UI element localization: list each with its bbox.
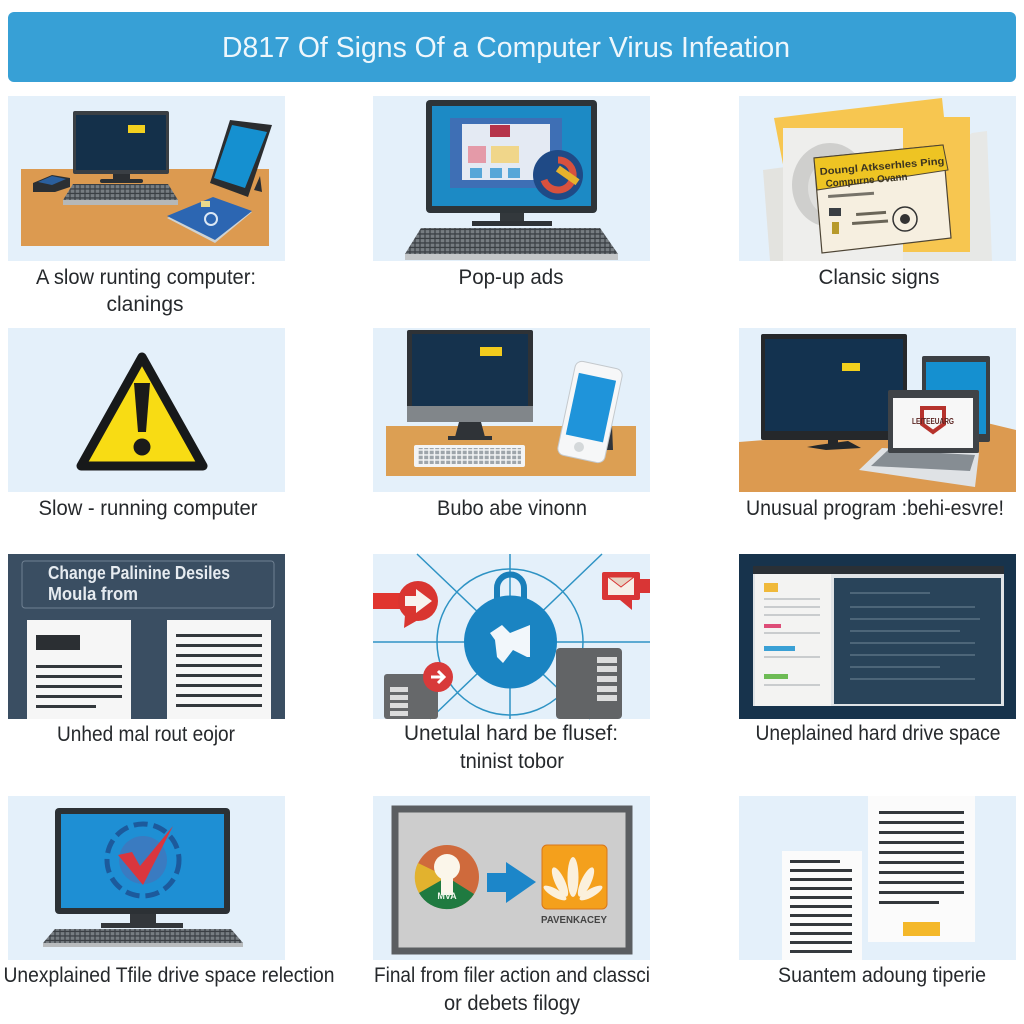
panel: monitor with check mark — [8, 796, 285, 960]
panel: change panel documents: Moula from — [48, 584, 138, 604]
caption 8: tninist tobor — [460, 750, 564, 773]
panel: classic signs documents: Compurne Ovann — [825, 172, 908, 190]
caption 12: Suantem adoung tiperie — [778, 964, 986, 987]
panel: file conversion screen: MVA — [437, 891, 457, 901]
caption 8: Unetulal hard be flusef: — [404, 722, 618, 745]
caption 8 — [404, 722, 618, 773]
caption 2: Pop-up ads — [458, 266, 564, 289]
panel: padlock network — [373, 554, 650, 719]
caption 3: Clansic signs — [818, 266, 940, 289]
panel: file conversion screen — [373, 796, 650, 960]
caption 10: Unexplained Tfile drive space relection — [4, 964, 334, 987]
panel: paper documents — [739, 796, 1016, 960]
caption 11 — [374, 964, 650, 1015]
panel: monitor tablet laptop: LEITEEUARG — [912, 417, 954, 426]
panel: warning triangle — [8, 328, 285, 492]
caption 1 — [36, 266, 256, 316]
panel: monitor tablet laptop — [739, 328, 1016, 492]
caption 11: Final from filer action and classci — [374, 964, 650, 987]
panel: classic signs documents — [739, 96, 1016, 261]
caption 4: Slow - running computer — [38, 497, 258, 520]
panel: file conversion screen: PAVENKACEY — [541, 915, 607, 926]
caption 7: Unhed mal rout eojor — [57, 723, 235, 746]
caption 1: A slow runting computer: — [36, 266, 256, 289]
panel: application window — [739, 554, 1016, 719]
panel: classic signs documents: Doungl Atkserhles Ping — [819, 156, 945, 178]
caption 11: or debets filogy — [444, 992, 580, 1015]
title banner: D817 Of Signs Of a Computer Virus Infeation — [222, 32, 790, 64]
panel: monitor and phone — [373, 328, 650, 492]
panel: change panel documents: Change Palinine Desiles — [48, 563, 230, 583]
panel: pop-up ads monitor — [373, 96, 650, 261]
title banner — [8, 12, 1016, 82]
caption 6: Unusual program :behi-esvre! — [746, 497, 1004, 520]
caption 5: Bubo abe vinonn — [437, 497, 587, 520]
caption 1: clanings — [106, 293, 184, 316]
panel: desk with monitor and tablet — [8, 96, 285, 261]
caption 9: Uneplained hard drive space — [756, 722, 1000, 745]
panel: change panel documents — [8, 554, 285, 719]
